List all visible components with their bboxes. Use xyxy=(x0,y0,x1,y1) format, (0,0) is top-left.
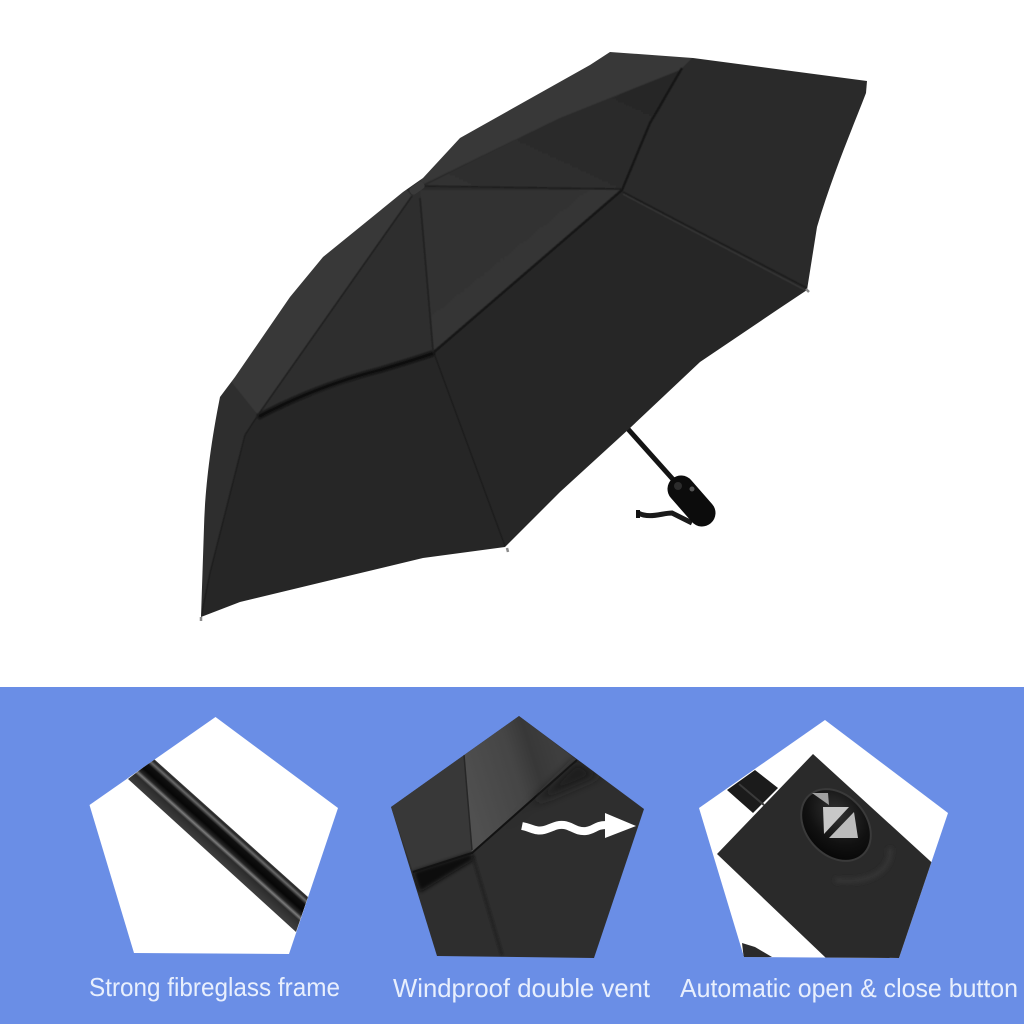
panel: fibreglass frame xyxy=(90,717,338,954)
button xyxy=(800,788,872,862)
vent shadow xyxy=(258,353,434,417)
caption: fibreglass frame: Strong fibreglass frame xyxy=(89,972,340,1002)
lower left side panel xyxy=(190,377,258,630)
canopy base fill xyxy=(201,58,808,617)
handle and strap xyxy=(628,429,702,523)
lower front panel xyxy=(261,358,421,417)
fibreglass rod close-up xyxy=(128,759,308,932)
caption: open and close button: Automatic open & close button xyxy=(680,973,1018,1003)
panel: automatic button xyxy=(699,720,948,958)
crown left panel xyxy=(272,357,418,409)
lower right panel xyxy=(622,60,880,288)
crown top strip xyxy=(420,52,692,184)
canopy ribs xyxy=(201,186,807,617)
handle close-up xyxy=(717,754,932,958)
caption: double vent: Windproof double vent xyxy=(393,973,651,1003)
arrow: wind flow xyxy=(522,813,636,838)
vent edge xyxy=(434,68,682,352)
panel: windproof vent xyxy=(391,716,644,958)
lower centre panel xyxy=(433,190,807,548)
vent close-up xyxy=(391,716,600,955)
canopy xyxy=(201,52,867,617)
umbrella product photo xyxy=(200,52,867,621)
crown rear panel xyxy=(438,184,439,185)
top knob xyxy=(408,180,426,196)
crown centre panel xyxy=(420,190,622,352)
rib tips xyxy=(201,289,809,621)
blue feature band xyxy=(0,687,1024,1024)
crown far-left strip xyxy=(230,188,412,415)
